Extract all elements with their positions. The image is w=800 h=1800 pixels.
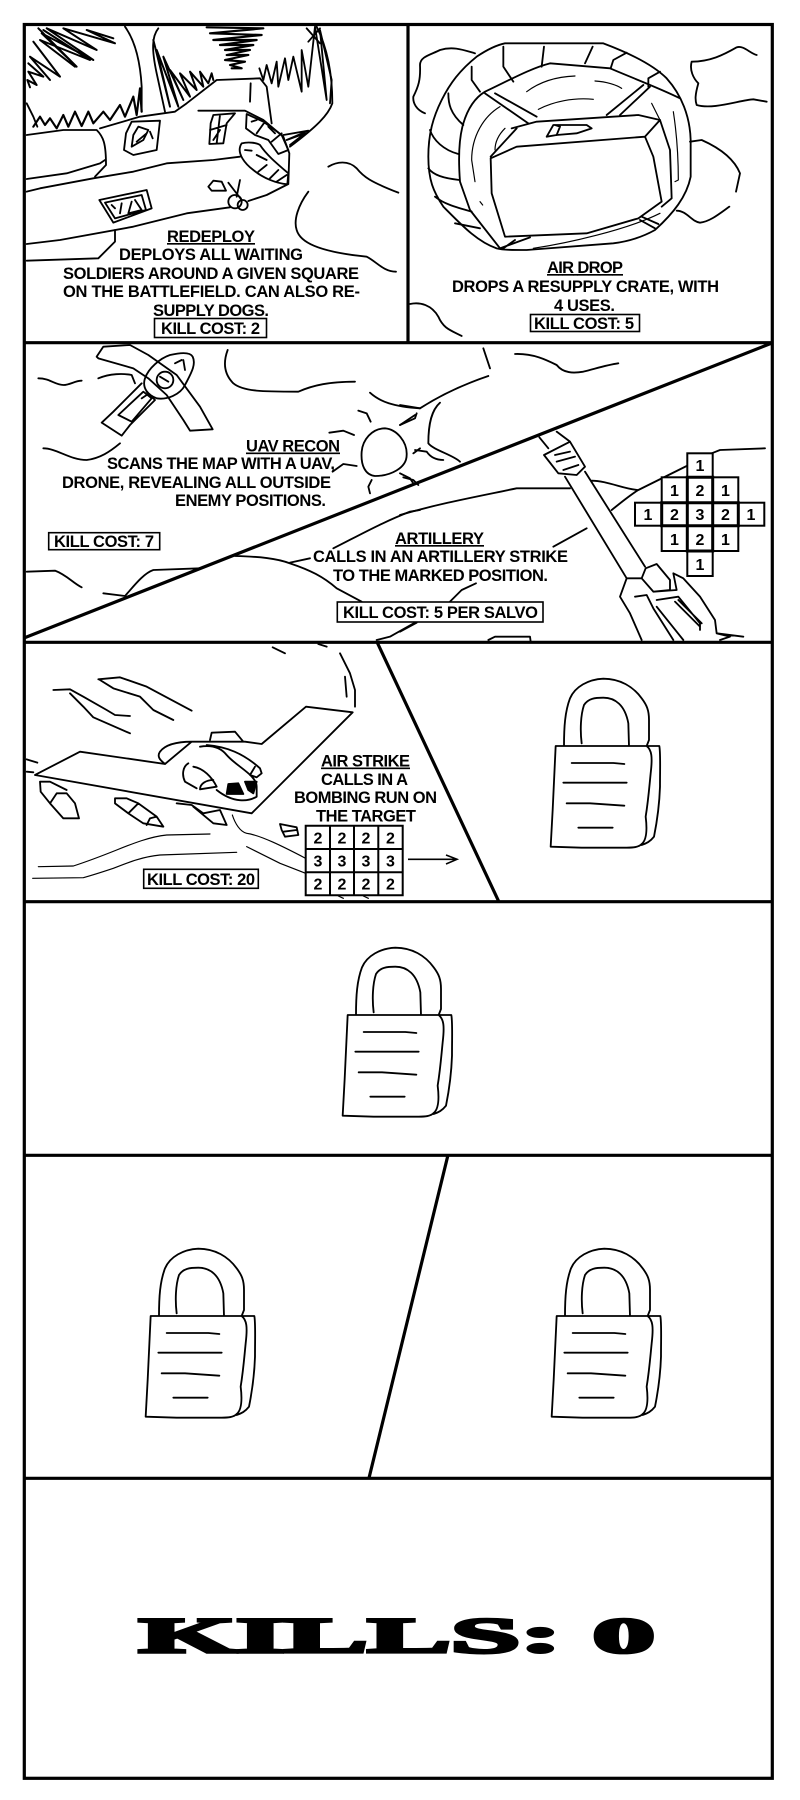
illustration: helicopter and hills: [27, 27, 398, 272]
damage grid: air strike: 2: [338, 876, 347, 894]
damage grid: air strike: 2: [386, 830, 395, 848]
kill cost: 2: KILL COST: 2: [161, 320, 260, 338]
text: uav recon description: DRONE, REVEALING ALL OUTSIDE: [62, 474, 331, 492]
kill cost: 7: KILL COST: 7: [54, 533, 154, 551]
icon: padlock 3: [146, 1249, 255, 1418]
damage grid: air strike: 2: [362, 876, 371, 894]
damage grid: air strike: 2: [314, 830, 323, 848]
text: air strike description: THE TARGET: [316, 808, 416, 826]
illustration: uav drone and terrain: [27, 345, 420, 596]
damage grid: artillery: 1: [721, 532, 730, 549]
kills counter: KILLS: 0: [139, 1607, 655, 1663]
text: redeploy description: SOLDIERS AROUND A GIVEN SQUARE: [63, 265, 359, 283]
heading: redeploy: REDEPLOY: [167, 228, 255, 246]
heading: uav recon: UAV RECON: [246, 438, 340, 456]
damage grid: air strike: 3: [362, 854, 371, 870]
damage grid: artillery: 1: [696, 557, 705, 574]
text: redeploy description: SUPPLY DOGS.: [153, 302, 269, 320]
illustration: supply crate with parachute: [410, 43, 767, 336]
damage grid: artillery: 1: [644, 507, 653, 524]
kill cost: 5: KILL COST: 5: [534, 315, 634, 333]
text: artillery description: CALLS IN AN ARTILLERY STRIKE: [313, 548, 568, 566]
panel: uav recon: [27, 345, 618, 596]
illustration: stealth bomber: [27, 644, 368, 898]
text: redeploy description: DEPLOYS ALL WAITING: [119, 246, 303, 264]
damage grid: air strike: 3: [386, 854, 395, 870]
text: artillery description: TO THE MARKED POSITION.: [333, 567, 548, 585]
text: air drop description: DROPS A RESUPPLY CRATE, WITH: [452, 278, 719, 296]
damage grid: artillery: 1: [721, 483, 730, 500]
damage grid: artillery: 2: [721, 507, 730, 524]
damage grid: air strike: 2: [386, 876, 395, 894]
damage grid: artillery: 2: [696, 483, 705, 500]
damage grid: artillery: 3: [696, 507, 705, 524]
icon: padlock 4: [552, 1249, 661, 1418]
damage grid: air strike: 3: [338, 854, 347, 870]
damage grid: air strike: [306, 826, 403, 895]
damage grid: air strike: 2: [314, 876, 323, 894]
arrow: strike direction: [408, 855, 457, 864]
damage grid: artillery: 1: [670, 483, 679, 500]
damage grid: artillery: 2: [670, 507, 679, 524]
panel: redeploy: [27, 27, 398, 338]
damage grid: artillery: [635, 453, 764, 576]
damage grid: artillery: 1: [696, 458, 705, 475]
text: air strike description: BOMBING RUN ON: [294, 789, 437, 807]
heading: artillery: ARTILLERY: [395, 530, 484, 548]
panel: air drop: [410, 43, 767, 336]
text: air drop description: 4 USES.: [554, 297, 615, 315]
text: air strike description: CALLS IN A: [321, 771, 408, 789]
icon: padlock 1: [551, 679, 660, 848]
text: uav recon description: SCANS THE MAP WITH A UAV,: [107, 455, 335, 473]
kill cost: 20: KILL COST: 20: [147, 871, 255, 889]
heading: air drop: AIR DROP: [547, 259, 623, 277]
damage grid: artillery: 1: [670, 532, 679, 549]
damage grid: artillery: 1: [747, 507, 756, 524]
damage grid: air strike: 2: [338, 830, 347, 848]
damage grid: artillery: 2: [696, 532, 705, 549]
icon: padlock 2: [343, 948, 452, 1117]
damage grid: air strike: 2: [362, 830, 371, 848]
damage grid: air strike: 3: [314, 854, 323, 870]
heading: air strike: AIR STRIKE: [321, 752, 410, 770]
text: redeploy description: ON THE BATTLEFIELD. CAN ALSO RE-: [63, 283, 360, 301]
illustration: artillery cannon and terrain: [235, 510, 420, 640]
kill cost: 5 per salvo: KILL COST: 5 PER SALVO: [343, 604, 538, 622]
text: uav recon description: ENEMY POSITIONS.: [175, 492, 326, 510]
panel: air strike: [27, 644, 457, 898]
panel: artillery: [235, 432, 765, 642]
